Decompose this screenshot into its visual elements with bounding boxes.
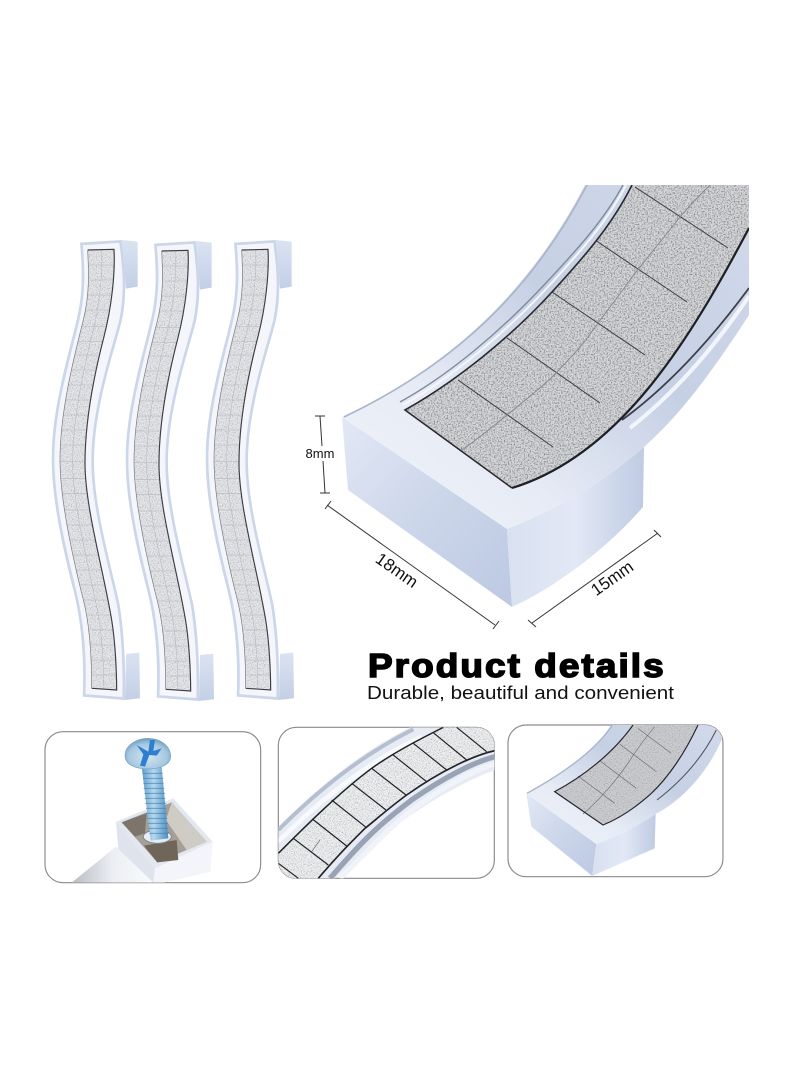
panel: three handles bbox=[52, 240, 294, 701]
dimension: 18mm: 18mm bbox=[372, 549, 422, 592]
mounting block bbox=[116, 822, 155, 883]
inlay bbox=[555, 725, 698, 825]
chrome top bbox=[526, 725, 723, 844]
inlay dark border bbox=[512, 228, 749, 488]
shaded outer edge bbox=[344, 185, 587, 417]
chrome band bbox=[278, 727, 495, 878]
dimension: 15mm bbox=[528, 530, 661, 627]
block cavity bbox=[122, 802, 207, 862]
right side face bbox=[507, 447, 644, 607]
dimension: 8mm: 8mm bbox=[306, 446, 334, 461]
inlay lines bbox=[578, 727, 671, 814]
panel: screw detail bbox=[45, 732, 261, 883]
inlay grid bbox=[458, 185, 728, 450]
inlay borders bbox=[278, 727, 443, 853]
subheading: Durable, beautiful and convenient bbox=[367, 683, 674, 703]
dimension: 18mm bbox=[325, 501, 499, 629]
dimension: 15mm: 15mm bbox=[587, 557, 637, 600]
inner lip bbox=[330, 757, 495, 878]
panel: large handle close-up bbox=[342, 185, 749, 607]
handle 1 bbox=[52, 240, 140, 700]
handle 2 bbox=[126, 241, 214, 701]
dimension: 8mm bbox=[306, 416, 334, 493]
tile lines bbox=[278, 727, 487, 878]
glitter inlay bbox=[405, 185, 749, 488]
side faces bbox=[526, 793, 596, 876]
panel: inlay detail bbox=[278, 727, 495, 878]
screw bbox=[125, 738, 171, 843]
left side face bbox=[342, 417, 512, 607]
heading: Product details bbox=[368, 648, 664, 685]
handle body bbox=[72, 847, 153, 883]
inlay bbox=[278, 727, 495, 878]
top chrome face bbox=[342, 185, 749, 529]
handle 3 bbox=[206, 240, 294, 700]
lower chrome lip bbox=[630, 296, 749, 428]
panel: corner detail bbox=[508, 725, 723, 877]
